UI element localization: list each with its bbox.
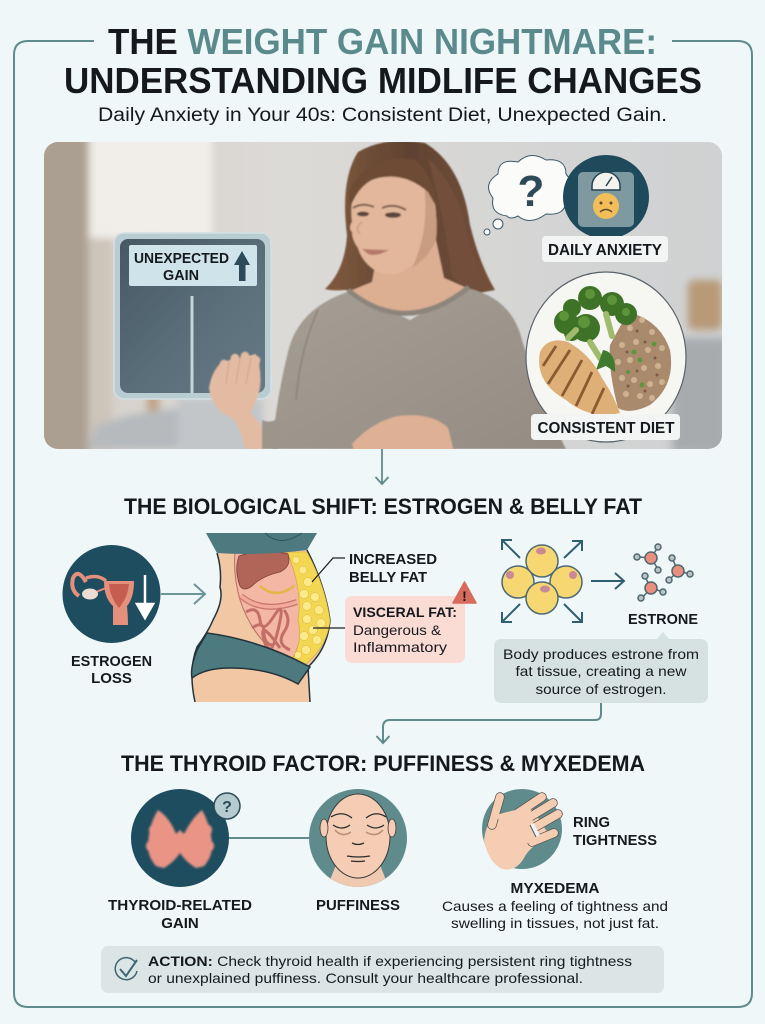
estrone label: ESTRONE (628, 611, 698, 628)
connector arrow to thyroid section (376, 703, 601, 743)
label: ring tightness (573, 814, 657, 849)
consistent diet label (531, 414, 680, 440)
label: puffiness: PUFFINESS (316, 897, 400, 914)
gallbladder band (260, 586, 294, 593)
icon: warning triangle (453, 582, 476, 604)
myxedema text block (442, 880, 668, 931)
icon: puffy face (309, 789, 407, 887)
leader: increased belly fat (312, 558, 345, 582)
label: increased belly fat: INCREASED (349, 551, 437, 568)
scale readout: UNEXPECTED (134, 251, 229, 267)
liver (237, 551, 289, 589)
arrow: fat cells to estrone (591, 573, 624, 589)
icon: hand with tight ring (482, 789, 562, 870)
action callout: or unexplained puffiness. Consult your healthcare professional. (148, 970, 583, 986)
title: THE WEIGHT GAIN NIGHTMARE: (108, 21, 657, 62)
arrow: hero to biology section (376, 449, 388, 484)
estrone explanation box: fat tissue, creating a new (516, 663, 687, 679)
anxiety scale icon (563, 155, 649, 239)
title: UNDERSTANDING MIDLIFE CHANGES (64, 60, 702, 101)
estrone explanation box: Body produces estrone from (503, 646, 699, 662)
label: thyroid-related gain: THYROID-RELATED (108, 897, 252, 914)
subtitle: Daily Anxiety in Your 40s: Consistent Diet, Unexpected Gain. (98, 105, 667, 126)
scale (114, 233, 271, 399)
estrogen loss label: LOSS (91, 670, 132, 687)
intestines (241, 596, 297, 607)
thought cloud with question mark: ? (518, 167, 544, 216)
heading: thyroid factor: THE THYROID FACTOR: PUFFINESS & MYXEDEMA (121, 751, 645, 776)
belly fat (287, 552, 330, 664)
bra band (206, 533, 317, 554)
estrone explanation box (494, 632, 708, 703)
daily anxiety label (542, 236, 668, 262)
action callout (101, 946, 664, 993)
label: thyroid-related gain: GAIN (161, 915, 199, 932)
label: ring tightness: RING (573, 814, 610, 831)
arrow: estrogen to belly (161, 584, 205, 604)
callout: visceral fat: VISCERAL FAT: (353, 604, 457, 620)
chicken (539, 340, 620, 415)
blurred room background (38, 135, 727, 458)
callout: visceral fat: Inflammatory (353, 639, 447, 655)
connector: thyroid to puffiness (229, 837, 309, 839)
broccoli (554, 286, 637, 342)
heading: biological shift: THE BIOLOGICAL SHIFT: ESTROGEN & BELLY FAT (124, 494, 643, 519)
face (350, 166, 436, 274)
sweater (272, 288, 566, 449)
estrone molecules (634, 544, 693, 601)
thought cloud with question mark (484, 155, 572, 235)
palm and wrist (484, 806, 550, 870)
myxedema text block: Causes a feeling of tightness and (442, 898, 668, 914)
side-swept fringe (350, 159, 436, 204)
title (64, 21, 702, 101)
action callout: ACTION: Check thyroid health if experiencing persistent ring tightness (148, 953, 632, 969)
hair back (325, 141, 495, 300)
facial features (353, 205, 406, 255)
finger fills (492, 797, 558, 842)
callout: visceral fat (345, 596, 465, 663)
neck and chest skin (350, 240, 467, 312)
quinoa (610, 312, 671, 411)
finger outlines (492, 797, 558, 842)
estrone explanation box: source of estrogen. (536, 681, 666, 697)
leader: visceral fat (313, 627, 345, 629)
consistent diet label: CONSISTENT DIET (538, 420, 675, 437)
myxedema text block: swelling in tissues, not just fat. (451, 915, 659, 931)
label: ring tightness: TIGHTNESS (573, 832, 657, 849)
organ cavity (235, 553, 301, 658)
hair front right (428, 160, 468, 286)
icon: estrogen loss (62, 545, 160, 643)
hand holding scale (209, 354, 282, 449)
hero photo panel (38, 135, 727, 458)
myxedema text block: MYXEDEMA (510, 880, 600, 897)
plate of food (526, 272, 686, 442)
hand on belly (352, 415, 454, 452)
icon: thyroid (131, 789, 240, 887)
icon: warning triangle: ! (462, 588, 467, 604)
outward arrows (502, 540, 582, 622)
fat cells cluster (502, 540, 582, 622)
daily anxiety label: DAILY ANXIETY (548, 242, 663, 259)
woman figure (272, 141, 566, 452)
label: thyroid-related gain (108, 897, 252, 932)
question badge: ? (222, 799, 232, 816)
label: increased belly fat (349, 551, 437, 586)
callout: visceral fat: Dangerous & (353, 622, 442, 638)
scale readout: GAIN (163, 268, 199, 284)
belly cross-section diagram (192, 533, 330, 702)
scale readout (129, 245, 257, 286)
label: increased belly fat: BELLY FAT (349, 569, 427, 586)
underwear (192, 633, 310, 684)
estrogen loss label: ESTROGEN (71, 653, 152, 670)
icon: check mark (115, 958, 137, 980)
